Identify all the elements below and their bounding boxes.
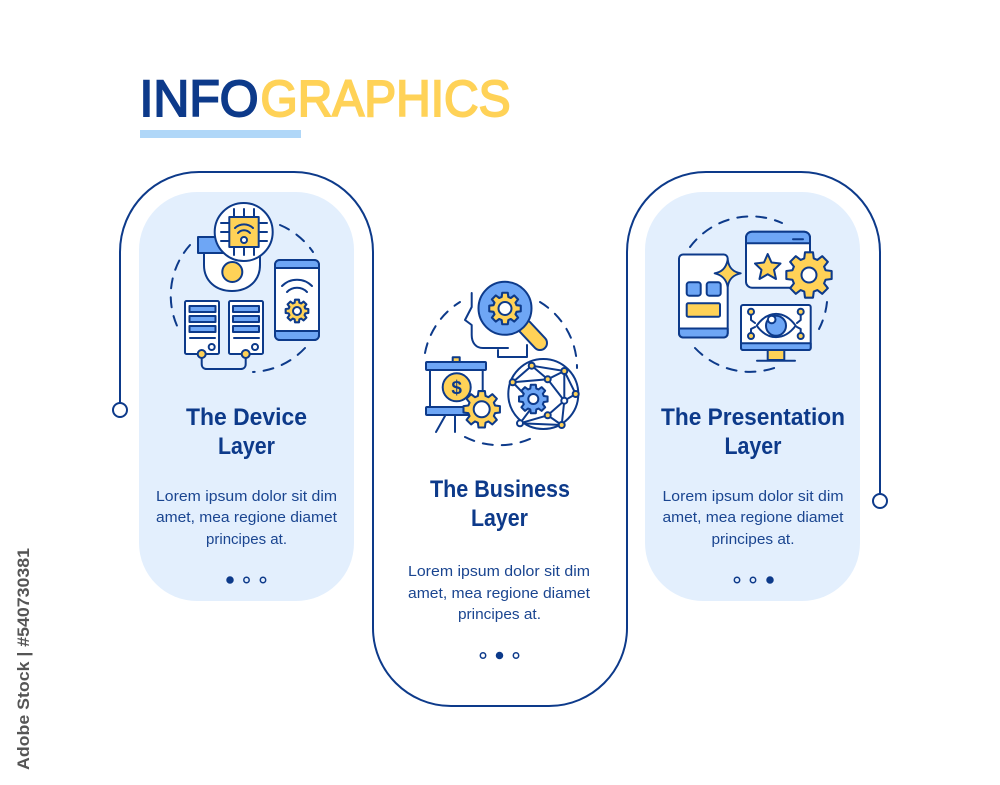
icon: device layer <box>171 203 319 372</box>
panel: presentation layer <box>645 192 860 601</box>
heading: business layer: Layer <box>471 505 528 532</box>
connector end node <box>873 494 887 508</box>
text: presentation layer: principes at. <box>712 532 794 548</box>
text: presentation layer: Lorem ipsum dolor sit dim <box>662 489 844 505</box>
title: GRAPHICS <box>260 70 510 127</box>
pagination dots: business layer <box>480 652 519 658</box>
title <box>140 70 510 138</box>
connector start node <box>113 403 127 417</box>
heading: business layer: The Business <box>430 476 570 503</box>
panel: business layer <box>408 282 590 658</box>
text: device layer: amet, mea regione diamet <box>156 510 337 526</box>
connector outline <box>120 172 880 706</box>
panel: device layer <box>139 192 354 601</box>
heading: device layer: The Device <box>186 404 307 431</box>
text: business layer: Lorem ipsum dolor sit dim <box>408 564 590 580</box>
heading: presentation layer: The Presentation <box>661 404 845 431</box>
icon: business layer: $ <box>451 378 462 399</box>
text: presentation layer: amet, mea regione diamet <box>662 510 844 526</box>
text: business layer: principes at. <box>458 607 541 623</box>
text: device layer: principes at. <box>206 532 287 548</box>
stock credit: Adobe Stock | #540730381 <box>14 548 33 770</box>
text: business layer: amet, mea regione diamet <box>408 586 590 602</box>
icon: presentation layer <box>679 216 832 372</box>
pagination dots: presentation layer <box>734 577 773 583</box>
heading: presentation layer: Layer <box>724 433 782 460</box>
pagination dots: device layer <box>227 577 266 583</box>
title: INFO <box>140 70 258 127</box>
text: device layer: Lorem ipsum dolor sit dim <box>156 489 337 505</box>
icon: business layer <box>425 282 579 445</box>
heading: device layer: Layer <box>218 433 275 460</box>
